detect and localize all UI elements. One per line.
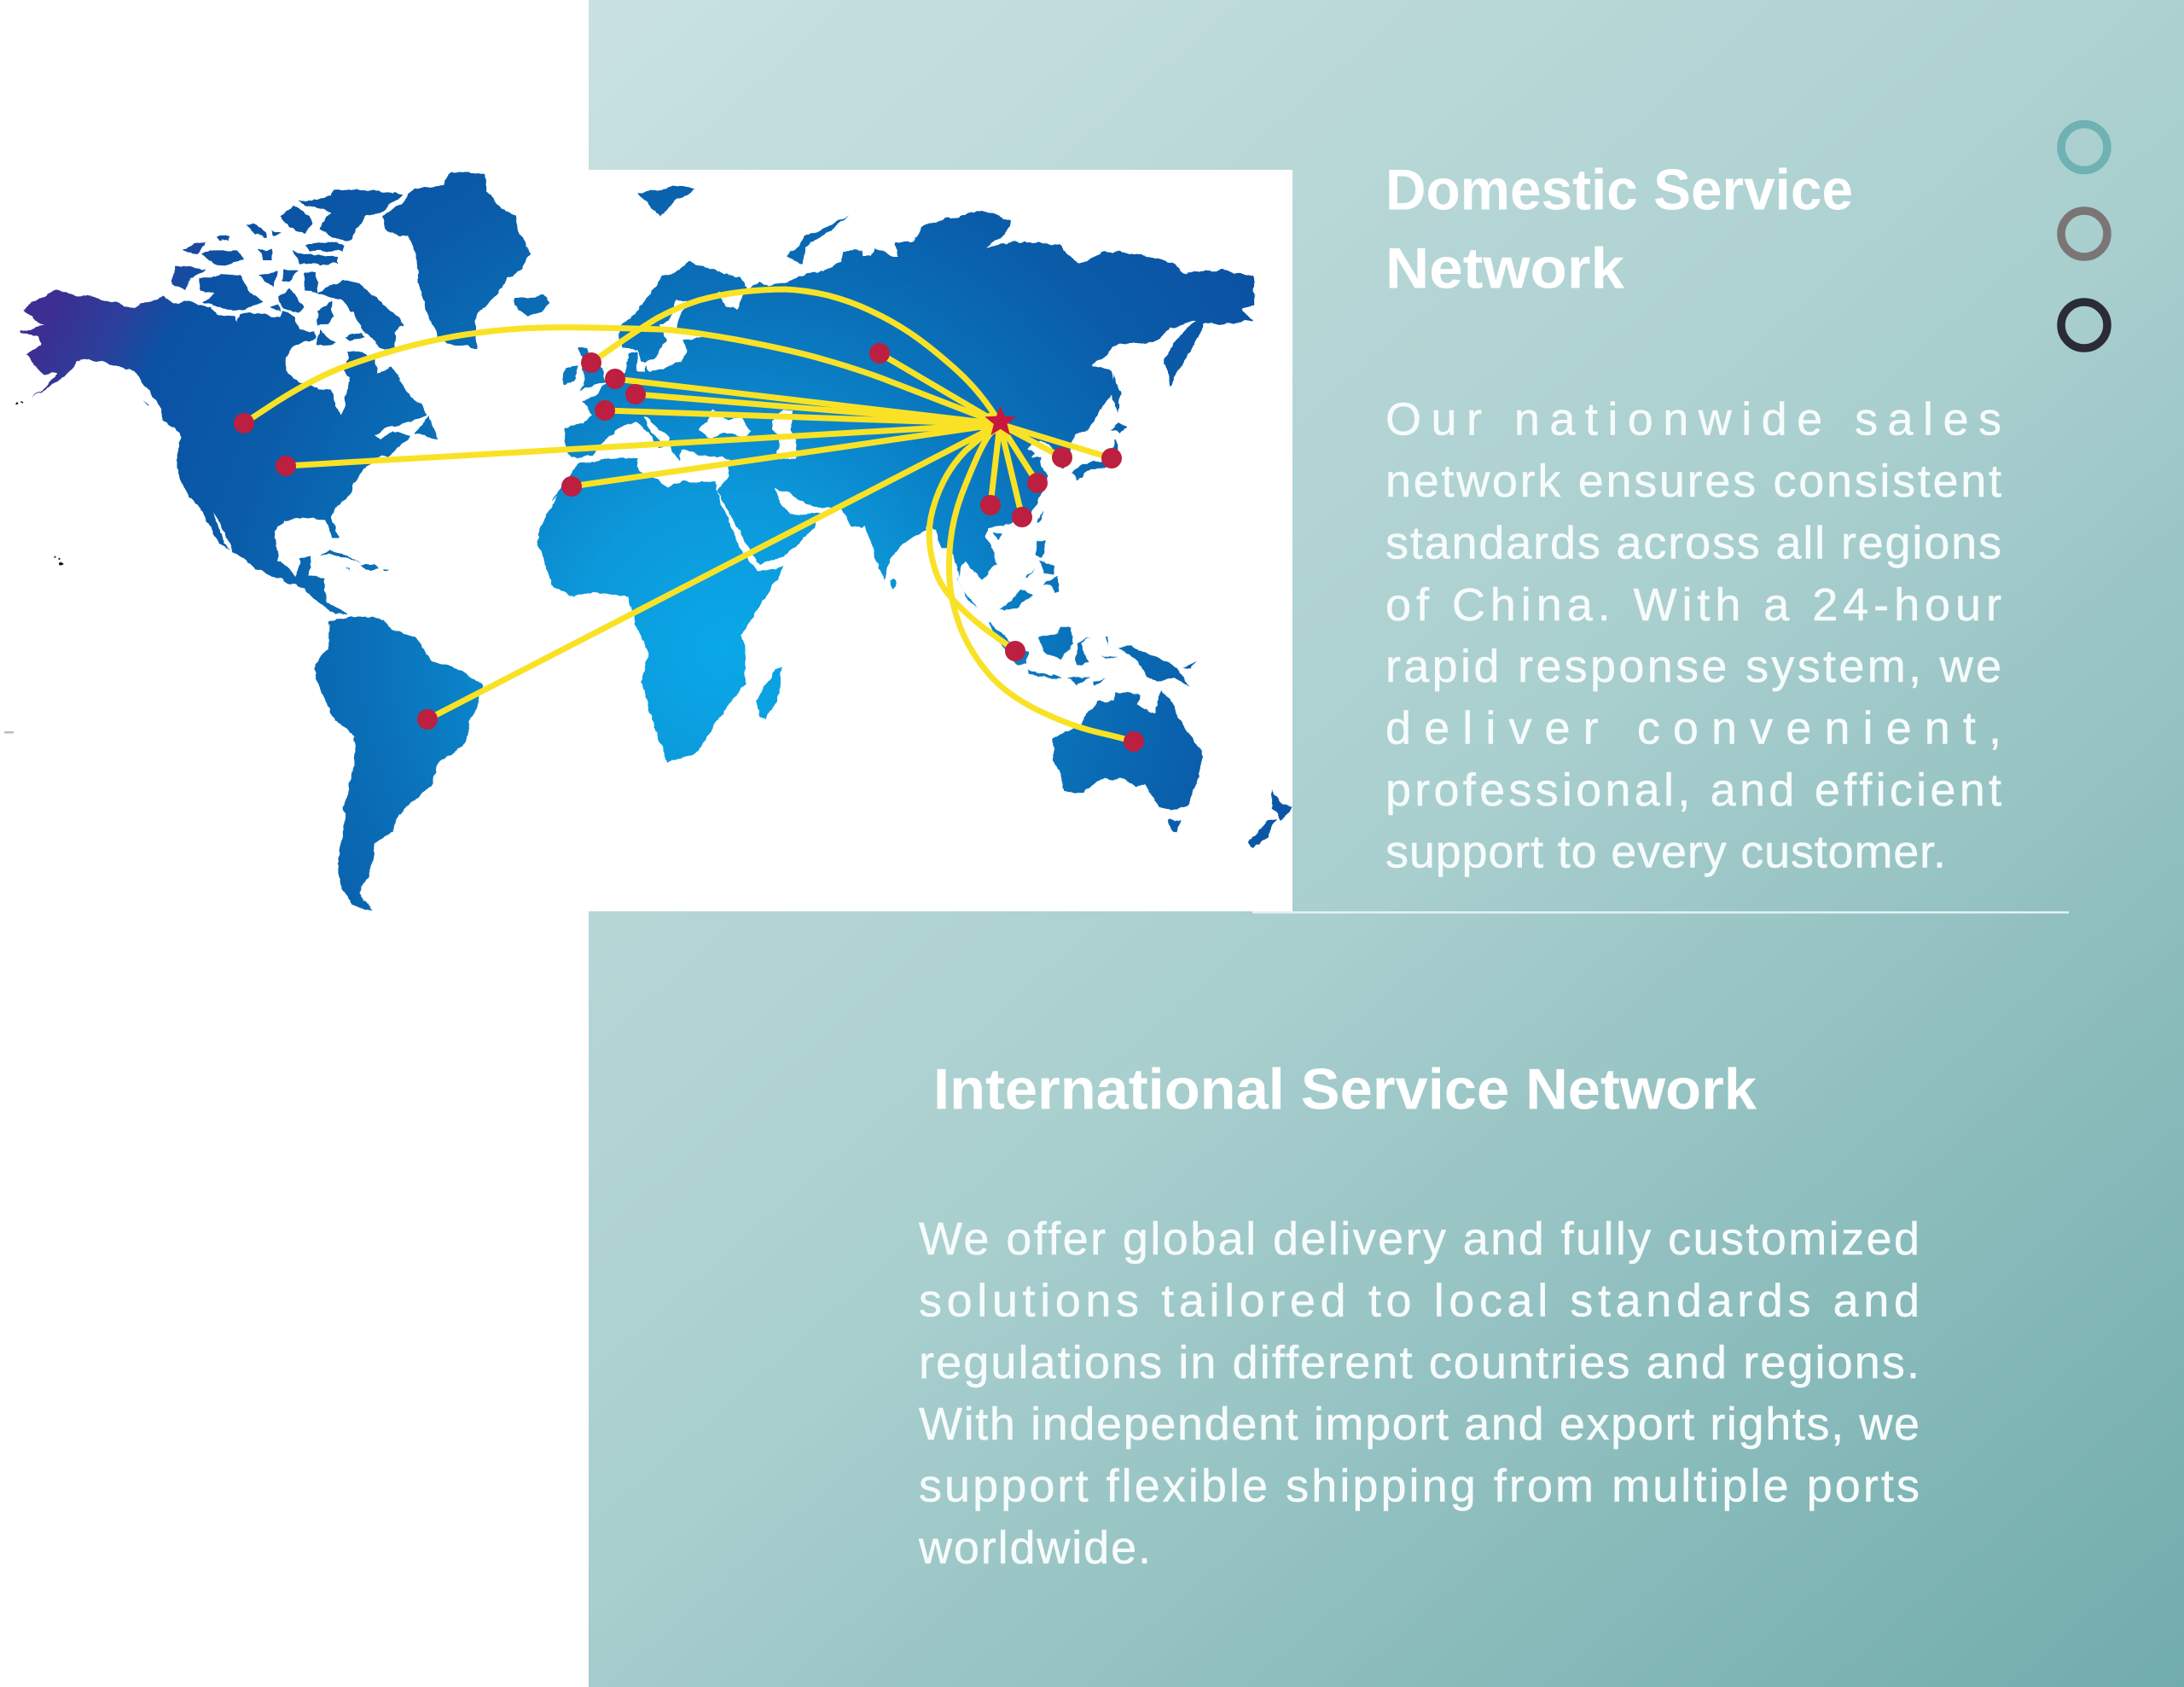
map: North America and Greenland xyxy=(16,172,549,614)
red star hub xyxy=(985,405,1016,435)
heading: Domestic Service Network xyxy=(1385,157,1853,300)
text block: domestic description: Our nationwide sales xyxy=(1385,394,2001,445)
indicator rings xyxy=(2061,125,2107,348)
map: Europe, Middle East and India xyxy=(563,256,926,589)
world map xyxy=(4,172,1292,910)
heading: Domestic Service Network: Network xyxy=(1385,236,1624,300)
small gray mark at left edge xyxy=(4,731,14,734)
text block: international description xyxy=(918,1213,1920,1574)
ring: teal xyxy=(2061,125,2107,171)
text block: domestic description: network ensures consistent xyxy=(1385,456,2001,507)
text block: international description: support flexible shipping from multiple ports xyxy=(919,1461,1920,1512)
text block: international description: We offer global delivery and fully customized xyxy=(919,1213,1920,1265)
red destination dots xyxy=(234,343,1144,752)
gradient background panel xyxy=(589,0,2184,1687)
yellow route lines xyxy=(244,289,1134,742)
map: East Asia, Southeast Asia and Oceania xyxy=(904,381,1292,847)
text block: domestic description: standards across all regions xyxy=(1385,517,2001,568)
ring: gray xyxy=(2061,211,2107,257)
text block: domestic description: of China. With a 24-hour xyxy=(1385,579,2001,631)
text block: international description: With independent import and export rights, we xyxy=(919,1399,1920,1450)
map: inland seas xyxy=(645,292,796,458)
map: South America xyxy=(316,616,482,910)
text block: domestic description: rapid response system, we xyxy=(1385,641,2001,692)
text block: domestic description: professional, and efficient xyxy=(1385,765,2001,816)
text block: domestic description xyxy=(1385,394,2001,877)
ring: dark xyxy=(2061,302,2107,348)
text block: domestic description: deliver convenient, xyxy=(1385,703,2001,754)
white map backdrop xyxy=(0,170,1292,911)
route hub glow xyxy=(979,413,1001,435)
text block: international description: worldwide. xyxy=(918,1522,1151,1574)
heading: International Service Network: International Service Network xyxy=(933,1056,1757,1121)
map: Africa and Madagascar xyxy=(537,457,785,761)
text block: international description: regulations in different countries and regions. xyxy=(919,1337,1920,1388)
map land masses xyxy=(16,172,1292,910)
text block: international description: solutions tailored to local standards and xyxy=(919,1275,1920,1326)
heading: Domestic Service Network: Domestic Service xyxy=(1385,157,1853,222)
divider line xyxy=(1252,911,2069,913)
map: northern Russia xyxy=(639,185,1254,447)
text block: domestic description: support to every customer. xyxy=(1385,826,1946,877)
